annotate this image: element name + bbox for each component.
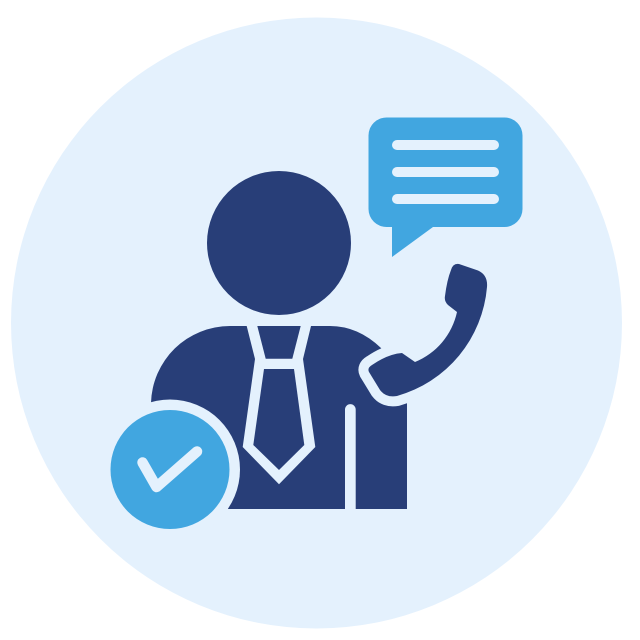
icon: telephone handset <box>368 264 487 396</box>
icon: speech bubble <box>368 117 523 257</box>
icon: check badge <box>100 400 240 540</box>
icon: torso with tie <box>151 326 407 509</box>
icon: head <box>207 171 351 315</box>
